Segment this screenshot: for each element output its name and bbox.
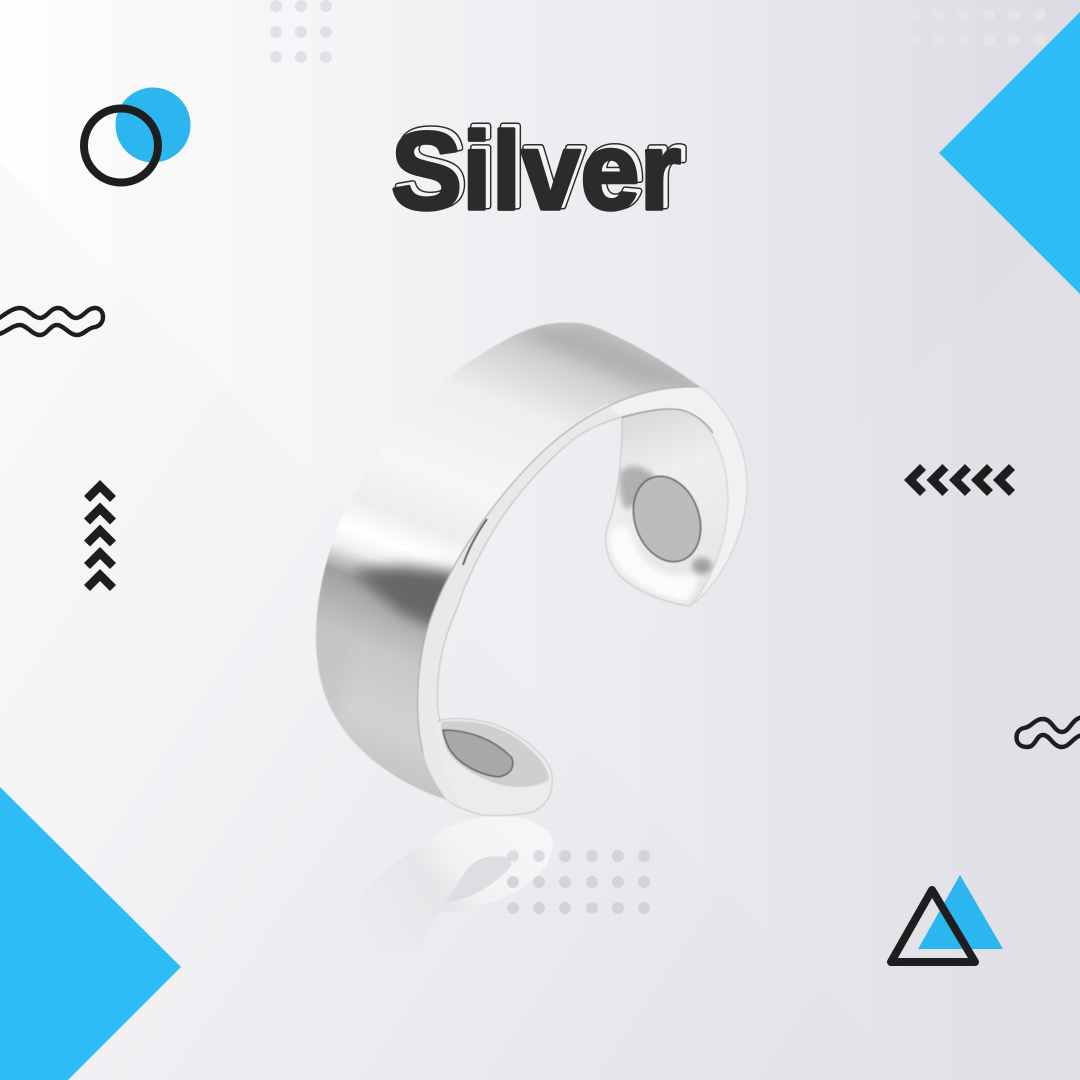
ring: right tab rim bbox=[600, 387, 747, 606]
ring: seat details bbox=[609, 466, 712, 602]
dots: top centre bbox=[270, 0, 332, 63]
icon: wave right bbox=[1016, 717, 1080, 747]
silver ring bbox=[300, 300, 747, 820]
icon: overlapping circles bbox=[84, 88, 190, 182]
ring: outer band bbox=[316, 322, 699, 800]
ring: right tab inner line bbox=[622, 409, 713, 433]
ring: edge shadow bbox=[463, 519, 487, 565]
title: Silver bbox=[395, 107, 685, 230]
icon: wave left bbox=[0, 308, 103, 335]
dots: bottom centre bbox=[507, 850, 650, 914]
ring: bottom magnet bbox=[443, 730, 513, 777]
ring: bottom tab inner bbox=[441, 721, 549, 787]
ring: front edge line bbox=[418, 387, 700, 753]
ring reflection bbox=[322, 816, 553, 950]
ring: left lip bbox=[418, 403, 622, 808]
dots: top right bbox=[907, 9, 1046, 46]
title: Silver bbox=[395, 107, 685, 230]
blue triangle: bottom left bbox=[0, 787, 181, 1080]
icon: chevrons left bbox=[910, 467, 1012, 493]
blue triangle: top right bbox=[939, 12, 1080, 294]
ring: bottom tab bbox=[423, 718, 552, 816]
ring: magnet bbox=[622, 467, 712, 571]
title: Silver bbox=[391, 110, 681, 233]
ring: right tab inner surface bbox=[606, 409, 728, 606]
ring: inner edge line bbox=[437, 417, 622, 722]
icon: chevrons up bbox=[87, 486, 113, 588]
icon: triangles bbox=[891, 875, 1003, 962]
